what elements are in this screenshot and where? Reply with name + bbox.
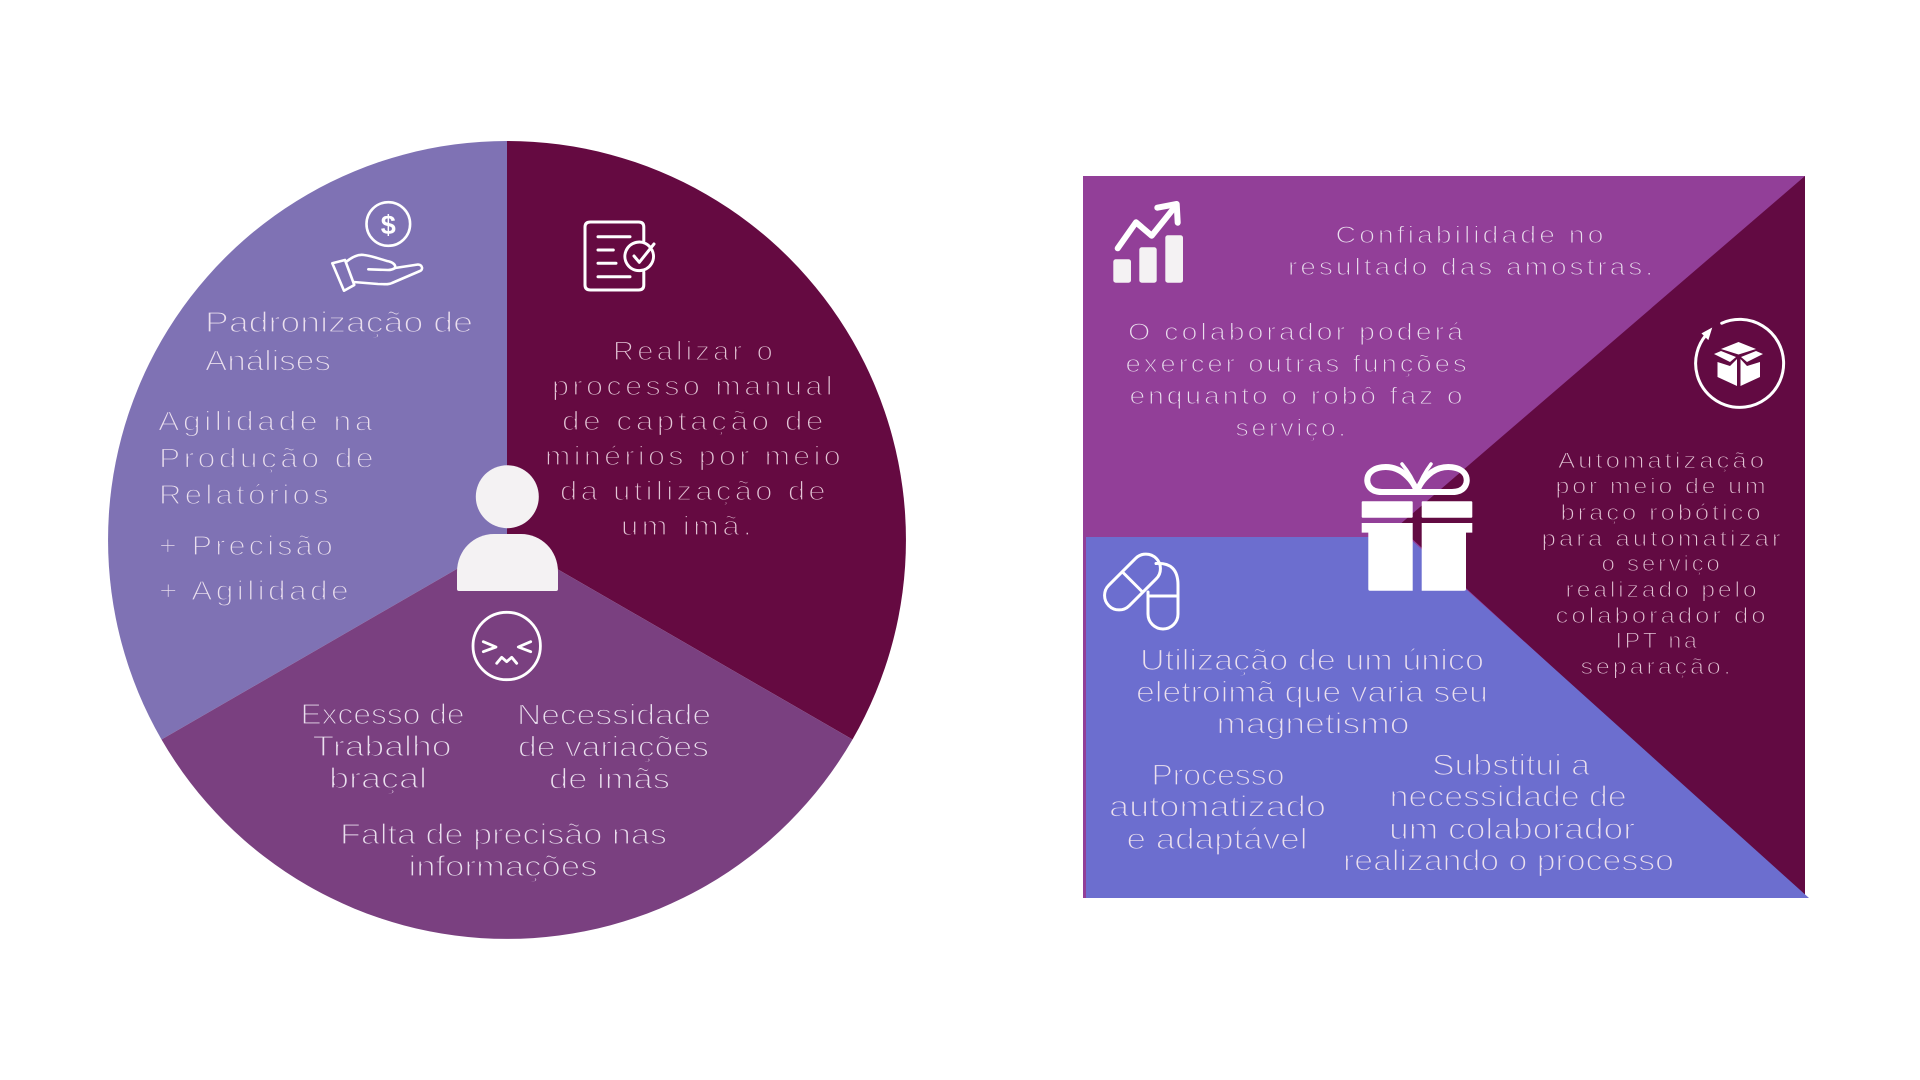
text: Substitui a necessidade de um colaborador: um colaborador	[1389, 813, 1635, 846]
text: Realizar o processo manual: um imã.	[621, 511, 755, 541]
text: Automatização por meio de um braço robótico: para automatizar	[1542, 526, 1784, 551]
icon: gift	[1362, 464, 1472, 591]
text: Automatização por meio de um braço robótico: o serviço	[1602, 551, 1722, 576]
text: Realizar o processo manual: de captação de	[562, 406, 827, 436]
text: O colaborador poderá exercer outras funções: enquanto o robô faz o	[1130, 383, 1466, 410]
text: Automatização por meio de um braço robótico: realizado pelo	[1566, 577, 1760, 602]
text: Utilização de um único eletroimã	[1136, 644, 1488, 740]
text: Confiabilidade no resultado das amostras	[1288, 222, 1656, 281]
panel: square diagram	[1083, 176, 1809, 898]
text: Agilidade na Produção de Relatórios	[158, 406, 377, 510]
text: O colaborador poderá exercer outras funções: O colaborador poderá	[1128, 319, 1466, 346]
text: Automatização por meio de um braço robótico: por meio de um	[1556, 474, 1768, 499]
text: Falta de precisão nas informações: informações	[408, 851, 598, 883]
text: Utilização de um único eletroimã: eletroimã que varia seu	[1136, 676, 1488, 709]
text: Padronização de Análises: Padronização de	[205, 307, 473, 339]
text: Utilização de um único eletroimã: Utilização de um único	[1140, 644, 1484, 677]
icon: squinting face	[473, 612, 540, 680]
text: Realizar o processo manual: da utilização de	[560, 476, 829, 506]
text: Automatização por meio de um braço robótico: IPT na	[1616, 628, 1700, 653]
wedge: problems	[162, 540, 852, 939]
wedge: benefits	[108, 141, 507, 740]
text: Automatização por meio de um braço robótico: Automatização	[1558, 448, 1767, 473]
text: Processo automatizado e adaptável	[1109, 759, 1326, 856]
text: Confiabilidade no resultado das amostras: Confiabilidade no	[1336, 222, 1606, 249]
text: Automatização por meio de um braço robótico: separação.	[1580, 654, 1734, 679]
text: Substitui a necessidade de um colaborador	[1343, 749, 1674, 878]
text: Confiabilidade no resultado das amostras: resultado das amostras.	[1288, 254, 1656, 281]
text: Processo automatizado e adaptável: Processo	[1152, 759, 1284, 792]
text: Excesso de Trabalho braçal: Excesso de	[300, 699, 464, 731]
quadrant: dark wedge	[1398, 176, 1805, 898]
text: Automatização por meio de um braço robótico: colaborador do	[1556, 603, 1768, 628]
text: Agilidade na Produção de Relatórios: Relatórios	[159, 479, 332, 510]
icon: hand holding coin	[332, 202, 422, 291]
text: Agilidade na Produção de Relatórios: Agilidade na	[158, 406, 376, 437]
text: Necessidade de variações de imãs: de variações	[518, 732, 709, 764]
text: Processo automatizado e adaptável: automatizado	[1109, 791, 1326, 824]
text: Padronização de Análises	[205, 307, 473, 378]
text: O colaborador poderá exercer outras funções: exercer outras funções	[1126, 351, 1470, 378]
icon: person	[457, 465, 558, 591]
quadrant: purple background	[1083, 176, 1805, 898]
text: Necessidade de variações de imãs: de imãs	[549, 764, 670, 796]
text: Realizar o processo manual: minérios por meio	[545, 441, 844, 471]
wedge: current process	[507, 141, 906, 740]
text: Excesso de Trabalho braçal: braçal	[329, 763, 427, 795]
text: Realizar o processo manual: Realizar o	[613, 336, 776, 366]
text: Processo automatizado e adaptável: e adaptável	[1126, 823, 1308, 856]
text: Falta de precisão nas informações: Falta de precisão nas	[340, 819, 667, 851]
text: Automatização por meio de um braço robótico	[1542, 448, 1784, 679]
icon: pills	[1099, 548, 1178, 629]
text: + Precisão: + Precisão	[159, 530, 336, 561]
text: Automatização por meio de um braço robótico: braço robótico	[1560, 500, 1764, 525]
text: O colaborador poderá exercer outras funções	[1126, 319, 1470, 442]
panel: pie chart	[108, 141, 906, 939]
text: Realizar o processo manual: processo manual	[552, 371, 836, 401]
text: Necessidade de variações de imãs: Necessidade	[517, 700, 711, 732]
text: + Agilidade: + Agilidade	[159, 575, 352, 606]
quadrant: blue	[1086, 537, 1809, 898]
icon: document with check	[585, 222, 654, 290]
text: Excesso de Trabalho braçal: Trabalho	[312, 731, 452, 763]
text: Substitui a necessidade de um colaborador: Substitui a	[1432, 749, 1590, 782]
text: Realizar o processo manual	[545, 336, 844, 541]
icon: growth chart	[1113, 204, 1183, 283]
icon: hand holding coin: $	[381, 210, 396, 240]
text: Utilização de um único eletroimã: magnetismo	[1216, 708, 1410, 740]
text: Agilidade na Produção de Relatórios: Produção de	[159, 443, 377, 474]
text: Padronização de Análises: Análises	[205, 346, 331, 378]
text: Substitui a necessidade de um colaborador: necessidade de	[1390, 781, 1627, 814]
icon: box with circular arrow	[1696, 319, 1784, 407]
text: Substitui a necessidade de um colaborador: realizando o processo	[1343, 845, 1674, 878]
text: Excesso de Trabalho braçal	[300, 699, 464, 795]
text: O colaborador poderá exercer outras funções: serviço.	[1236, 415, 1348, 442]
text: Falta de precisão nas informações	[340, 819, 667, 883]
text: Necessidade de variações de imãs	[517, 700, 711, 796]
